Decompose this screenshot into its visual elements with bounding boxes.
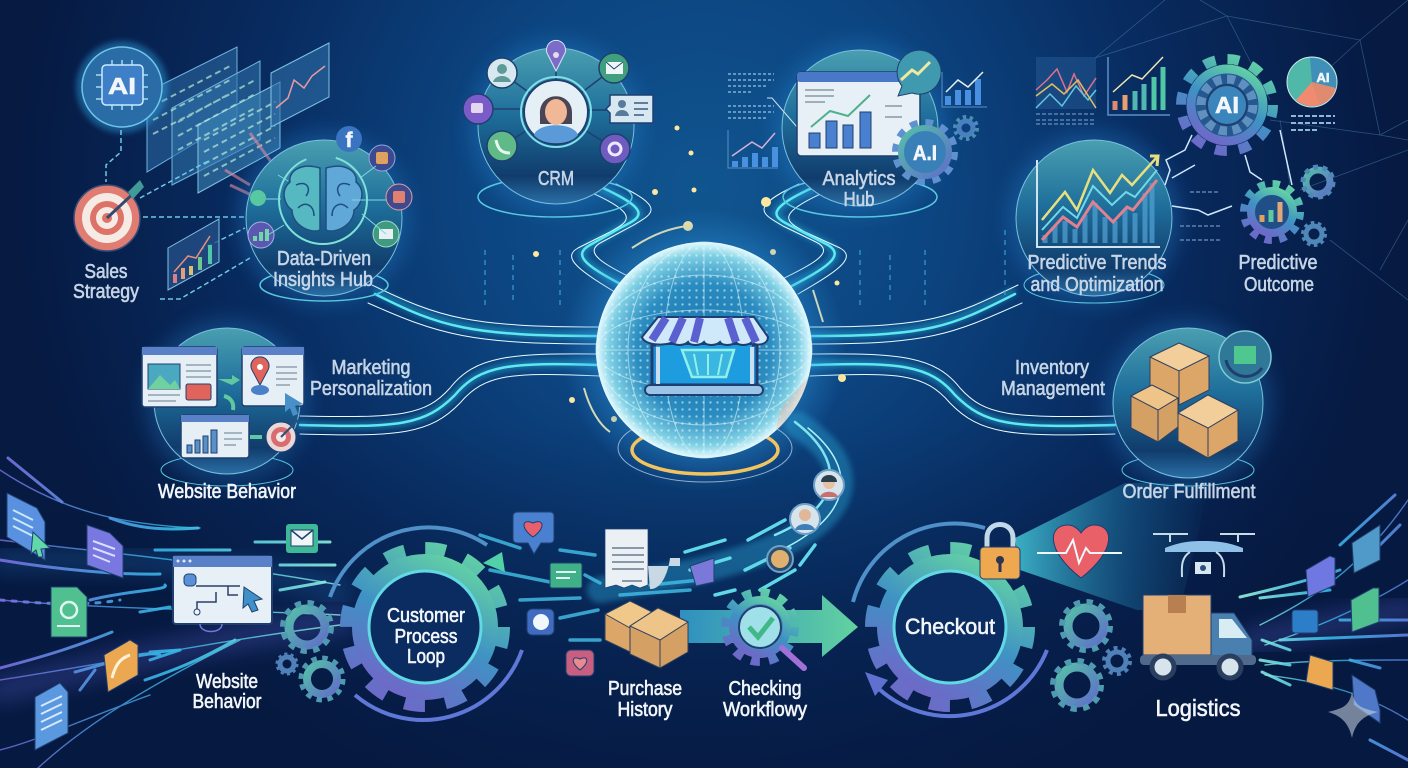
streaks center bottom	[480, 535, 700, 640]
small gear	[955, 117, 977, 139]
bottom flow streaks right	[1240, 495, 1408, 760]
heading: sales strategy: Strategy	[73, 281, 139, 303]
heading: checking workflow: Workflowy	[723, 699, 807, 721]
icon: target	[74, 180, 144, 251]
connector lines: hub network	[300, 184, 1115, 435]
heading: customer process loop: Loop	[407, 646, 445, 668]
vertical data ticks	[485, 230, 1005, 305]
icon: AI chip: AI	[108, 73, 136, 99]
icon: outcome gear	[1244, 184, 1300, 240]
chart: predictive trends	[1037, 156, 1160, 247]
icon: purchase boxes	[605, 601, 688, 668]
heading: customer process loop	[387, 605, 465, 668]
heading: sales strategy: Sales	[84, 261, 128, 283]
icon: email	[286, 524, 318, 553]
icon: delivery truck	[1140, 595, 1256, 678]
icon: trend badge	[897, 50, 941, 96]
panel: predictive outcome	[1036, 57, 1337, 296]
heading: customer process loop: Process	[394, 626, 458, 648]
heading: predictive outcome: Outcome	[1244, 274, 1314, 296]
floating icons center bottom	[513, 512, 594, 676]
heading: marketing personalization: Marketing	[332, 357, 410, 379]
side chart	[942, 72, 987, 107]
heading: data-driven insights hub: Insights Hub	[273, 269, 373, 291]
icon: heart monitor	[1037, 525, 1122, 578]
central globe	[562, 208, 846, 492]
icon: AI pie: AI	[1316, 70, 1330, 85]
icon: analytics window	[797, 72, 920, 156]
golden ring	[618, 414, 792, 482]
heading: predictive outcome: Predictive	[1238, 252, 1318, 274]
icon: doc green	[51, 587, 87, 637]
heading: purchase history	[608, 678, 682, 721]
icon: small target	[266, 420, 298, 452]
heading: CRM: CRM	[538, 168, 574, 190]
heading: data-driven insights hub	[273, 248, 373, 291]
icon: check gear	[727, 594, 804, 668]
ribbon from globe to purchase	[600, 422, 841, 595]
gear: checkout	[853, 524, 1047, 716]
panel: predictive trends	[1008, 132, 1180, 304]
heading: website behavior lower: Behavior	[192, 691, 262, 713]
heading: inventory management: Management	[1001, 378, 1105, 400]
panel: sales strategy	[73, 41, 329, 303]
heading: customer process loop: Customer	[387, 605, 465, 627]
lightning	[1165, 130, 1292, 215]
gear: customer process loop	[330, 527, 522, 720]
icon: AI gear: A.I	[913, 142, 937, 165]
icon: doc purple	[87, 525, 123, 578]
icon: AI gear large	[1181, 59, 1273, 151]
social icons	[248, 126, 412, 248]
icon: refresh badge	[1219, 331, 1271, 383]
icon: heart bubble	[513, 512, 554, 554]
heading: marketing personalization	[310, 357, 432, 400]
heading: website behavior lower	[192, 671, 262, 713]
icon: AI gear	[896, 123, 954, 181]
document icons right	[1292, 525, 1380, 723]
heading: analytics hub: Hub	[844, 189, 874, 211]
mini charts	[1036, 57, 1170, 124]
heading: sales strategy	[73, 261, 139, 303]
icon: window chart	[181, 415, 249, 458]
heading: checking workflow	[723, 678, 807, 721]
icon: AI gear large: AI	[1215, 92, 1239, 118]
icon: boxes	[1131, 343, 1238, 458]
heading: predictive trends: and Optimization	[1030, 274, 1164, 296]
icon: doc orange	[104, 640, 138, 692]
icon: small gears	[1303, 167, 1333, 245]
sparkle watermark	[1328, 692, 1378, 738]
icon: drone	[1153, 534, 1255, 577]
panel: inventory management	[1001, 319, 1272, 503]
icon: AI chip	[76, 41, 168, 133]
icon: doc blue	[7, 493, 50, 560]
heading: purchase history: Purchase	[608, 678, 682, 700]
heading: predictive trends	[1028, 252, 1166, 296]
icon: padlock	[980, 524, 1020, 579]
dashed connector	[106, 130, 250, 299]
heading: analytics hub: Analytics	[822, 168, 896, 190]
icon: doc blue lower	[35, 683, 68, 750]
bottom flow streaks left	[0, 458, 340, 768]
heading: inventory management: Inventory	[1015, 357, 1089, 379]
background network lines	[1095, 0, 1408, 300]
panel: analytics hub	[728, 42, 987, 217]
panel: data-driven insights hub	[238, 126, 412, 304]
customer avatars on ribbon	[767, 470, 844, 572]
heading: website behavior lower: Website	[196, 671, 258, 693]
icon: process window	[173, 556, 272, 632]
heading: website behavior: Website Behavior	[158, 481, 296, 503]
icon: AI pie	[1287, 57, 1337, 107]
social icons: f	[346, 129, 354, 152]
satellite icons	[463, 40, 653, 164]
heading: checkout: Checkout	[905, 614, 995, 639]
heading: marketing personalization: Personalization	[310, 378, 432, 400]
panel: marketing personalization	[142, 319, 432, 503]
heading: data-driven insights hub: Data-Driven	[277, 248, 371, 270]
document icons left	[7, 493, 138, 750]
sparkles and arcs	[533, 126, 846, 432]
heading: predictive trends: Predictive Trends	[1028, 252, 1166, 274]
data panels	[147, 43, 329, 200]
heading: checking workflow: Checking	[728, 678, 802, 700]
panel: CRM	[463, 40, 653, 217]
small gears right	[1053, 602, 1130, 709]
icon: receipt	[605, 529, 714, 589]
security beam	[1015, 483, 1210, 610]
arrow and workflow gear	[680, 594, 858, 721]
icon: window location	[242, 347, 304, 416]
heading: order fulfillment: Order Fulfillment	[1122, 481, 1256, 503]
heading: inventory management	[1001, 357, 1105, 400]
mini chart	[168, 219, 219, 290]
small gears left	[277, 603, 343, 700]
icon: window image	[142, 347, 217, 407]
heading: purchase history: History	[618, 699, 672, 721]
heading: predictive outcome	[1238, 252, 1318, 296]
icon: storefront laptop	[642, 317, 768, 395]
heading: analytics hub	[822, 168, 896, 211]
icon: customer	[521, 77, 591, 147]
icon: brain	[284, 166, 362, 231]
heading: logistics: Logistics	[1156, 695, 1240, 721]
